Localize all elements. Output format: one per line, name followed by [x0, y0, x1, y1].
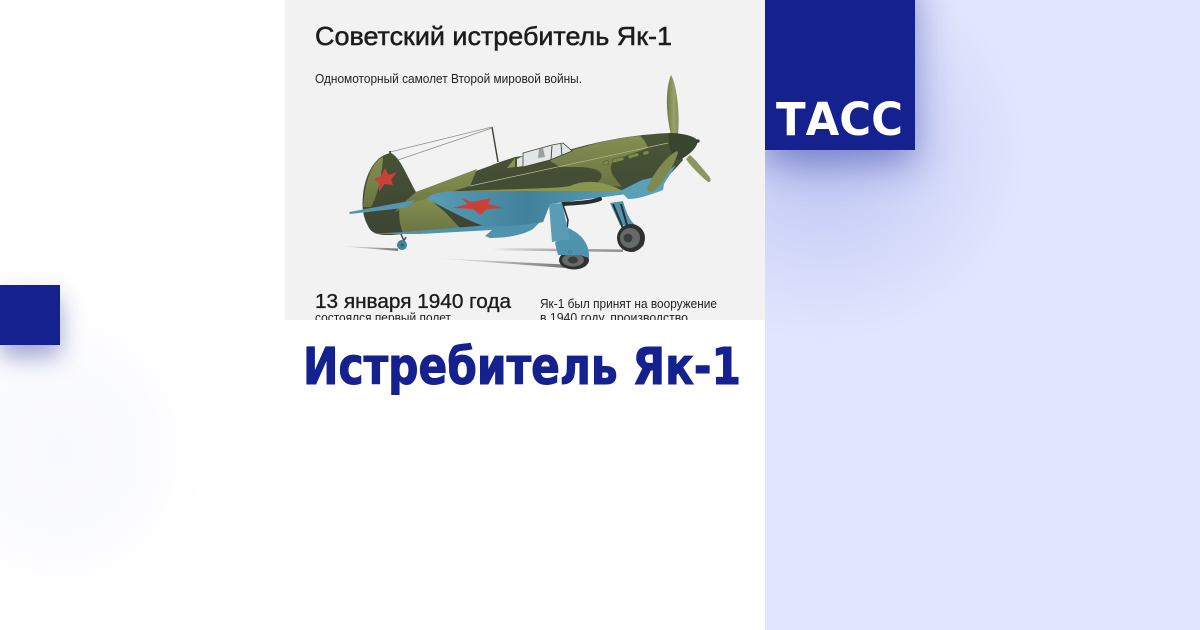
- panel subtitle: Одномоторный самолет Второй мировой войны.: [315, 72, 582, 86]
- red star on wing: [453, 198, 504, 215]
- panel title: Советский истребитель Як-1: [315, 21, 672, 51]
- TASS logo: [765, 0, 915, 150]
- fuselage: [363, 133, 683, 235]
- TASS logo: ТАСС: [776, 93, 903, 146]
- main landing gear: [549, 203, 589, 270]
- propeller rear blades: [667, 75, 711, 182]
- antenna mast and wires: [390, 127, 498, 162]
- red star on fin: [374, 168, 397, 192]
- lower tail wheel: [397, 234, 407, 250]
- propeller front blade: [647, 151, 678, 192]
- lower cowl: [620, 165, 676, 199]
- service description: Як-1 был принят на вооружение: [540, 297, 717, 311]
- tail stabilizer: [349, 200, 415, 214]
- date heading: 13 января 1940 года: [315, 291, 512, 313]
- exhaust pipes: [603, 150, 649, 165]
- spinner: [669, 133, 698, 160]
- right background panel: [765, 0, 1200, 630]
- service description: [540, 297, 717, 325]
- cockpit canopy: [507, 143, 572, 168]
- front landing gear: [610, 201, 645, 252]
- infographic preview panel: [285, 0, 765, 320]
- ground shadows: [338, 246, 623, 268]
- wing: [427, 191, 626, 227]
- belly strip and radiator: [372, 222, 540, 238]
- illustration: Yak-1 fighter: [338, 75, 711, 270]
- wing root fairing: [463, 182, 623, 191]
- wheel well: [563, 199, 600, 204]
- decorative left square: [0, 285, 60, 345]
- fuselage highlight line: [470, 143, 668, 186]
- camouflage patches: [363, 136, 648, 234]
